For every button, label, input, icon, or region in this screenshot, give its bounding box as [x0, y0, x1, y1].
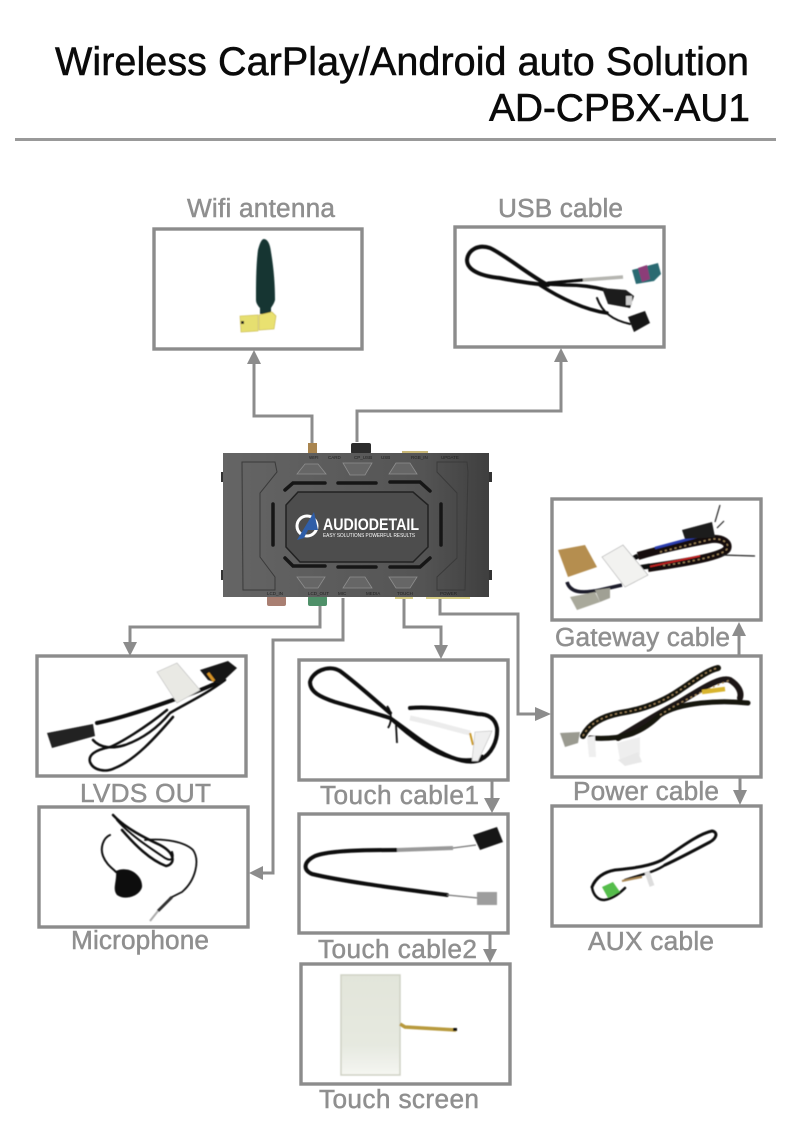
- label: touch cable 2: Touch cable2: [318, 934, 477, 964]
- device trapezoid buttons: [297, 463, 417, 588]
- device port labels: CARD: [328, 455, 342, 460]
- arrow: device to microphone: [249, 598, 343, 880]
- device port labels: MIC: [338, 591, 347, 596]
- panel: power cable: [552, 656, 761, 806]
- device vents: [273, 482, 441, 567]
- device port labels: POWER: [440, 591, 458, 596]
- label: gateway cable: Gateway cable: [555, 622, 730, 652]
- arrow: device to touch cable 1: [404, 598, 448, 659]
- panel: gateway cable: [552, 499, 761, 652]
- device port labels: [267, 455, 459, 596]
- panel: wifi antenna: [154, 193, 362, 349]
- panel: AUX cable: [552, 806, 761, 956]
- icon: USB cable: [467, 247, 661, 332]
- title: Wireless CarPlay/Android auto Solution: [55, 40, 749, 84]
- device port labels: MEDIA: [366, 591, 380, 596]
- device port labels: USB: [381, 455, 390, 460]
- panel: touch screen: [301, 964, 510, 1114]
- device port labels: TOUCH: [397, 591, 413, 596]
- arrow: power to AUX cable: [733, 778, 747, 805]
- device port labels: CP_USB: [354, 455, 372, 460]
- icon: gateway cable: [558, 505, 755, 610]
- label: USB cable: USB cable: [498, 193, 623, 223]
- arrow: device to power cable: [440, 598, 551, 721]
- label: touch screen: Touch screen: [319, 1084, 479, 1114]
- icon: LVDS cable: [47, 661, 237, 770]
- label: microphone: Microphone: [71, 925, 209, 955]
- icon: microphone: [102, 815, 196, 921]
- arrow: touch cable 2 to touch screen: [483, 934, 497, 963]
- label: AUX cable: AUX cable: [588, 926, 714, 956]
- icon: touch cable 2: [306, 827, 503, 905]
- device body markings: [242, 462, 468, 590]
- device port labels: UPDATE: [441, 455, 459, 460]
- panel: touch cable 2: [299, 814, 508, 964]
- device port labels: LCD_OUT: [308, 591, 329, 596]
- device centre plate: [286, 492, 428, 562]
- icon: touch screen: [341, 975, 457, 1075]
- logo: AUDIODETAIL: [323, 516, 419, 534]
- label: touch cable 1: Touch cable1: [320, 780, 479, 810]
- label: power cable: Power cable: [573, 776, 719, 806]
- arrow: touch cable 1 to touch cable 2: [484, 781, 500, 813]
- title: [55, 40, 750, 130]
- device port labels: RGB_IN: [411, 455, 428, 460]
- device port labels: WIFI: [309, 455, 318, 460]
- connectors: [221, 443, 492, 606]
- arrow: power to gateway cable: [732, 622, 746, 655]
- icon: AUX cable: [592, 831, 716, 900]
- label: wifi antenna: Wifi antenna: [187, 193, 335, 223]
- panel: LVDS OUT: [37, 656, 246, 808]
- icon: touch cable 1: [310, 668, 497, 762]
- icon: power cable: [560, 668, 748, 766]
- panel: touch cable 1: [299, 660, 508, 810]
- main device: [221, 443, 492, 606]
- logo: [297, 512, 419, 540]
- panel: microphone: [39, 807, 248, 955]
- arrow: device to LVDS OUT: [123, 605, 320, 656]
- arrow: device to USB cable: [357, 348, 568, 442]
- panel: USB cable: [455, 193, 664, 347]
- logo: EASY SOLUTIONS POWERFUL RESULTS: [323, 533, 415, 539]
- label: LVDS OUT: LVDS OUT: [80, 778, 211, 808]
- arrow: device to wifi antenna: [247, 350, 312, 445]
- icon: antenna: [240, 239, 276, 332]
- title: AD-CPBX-AU1: [489, 87, 750, 130]
- device port labels: LCD_IN: [267, 591, 283, 596]
